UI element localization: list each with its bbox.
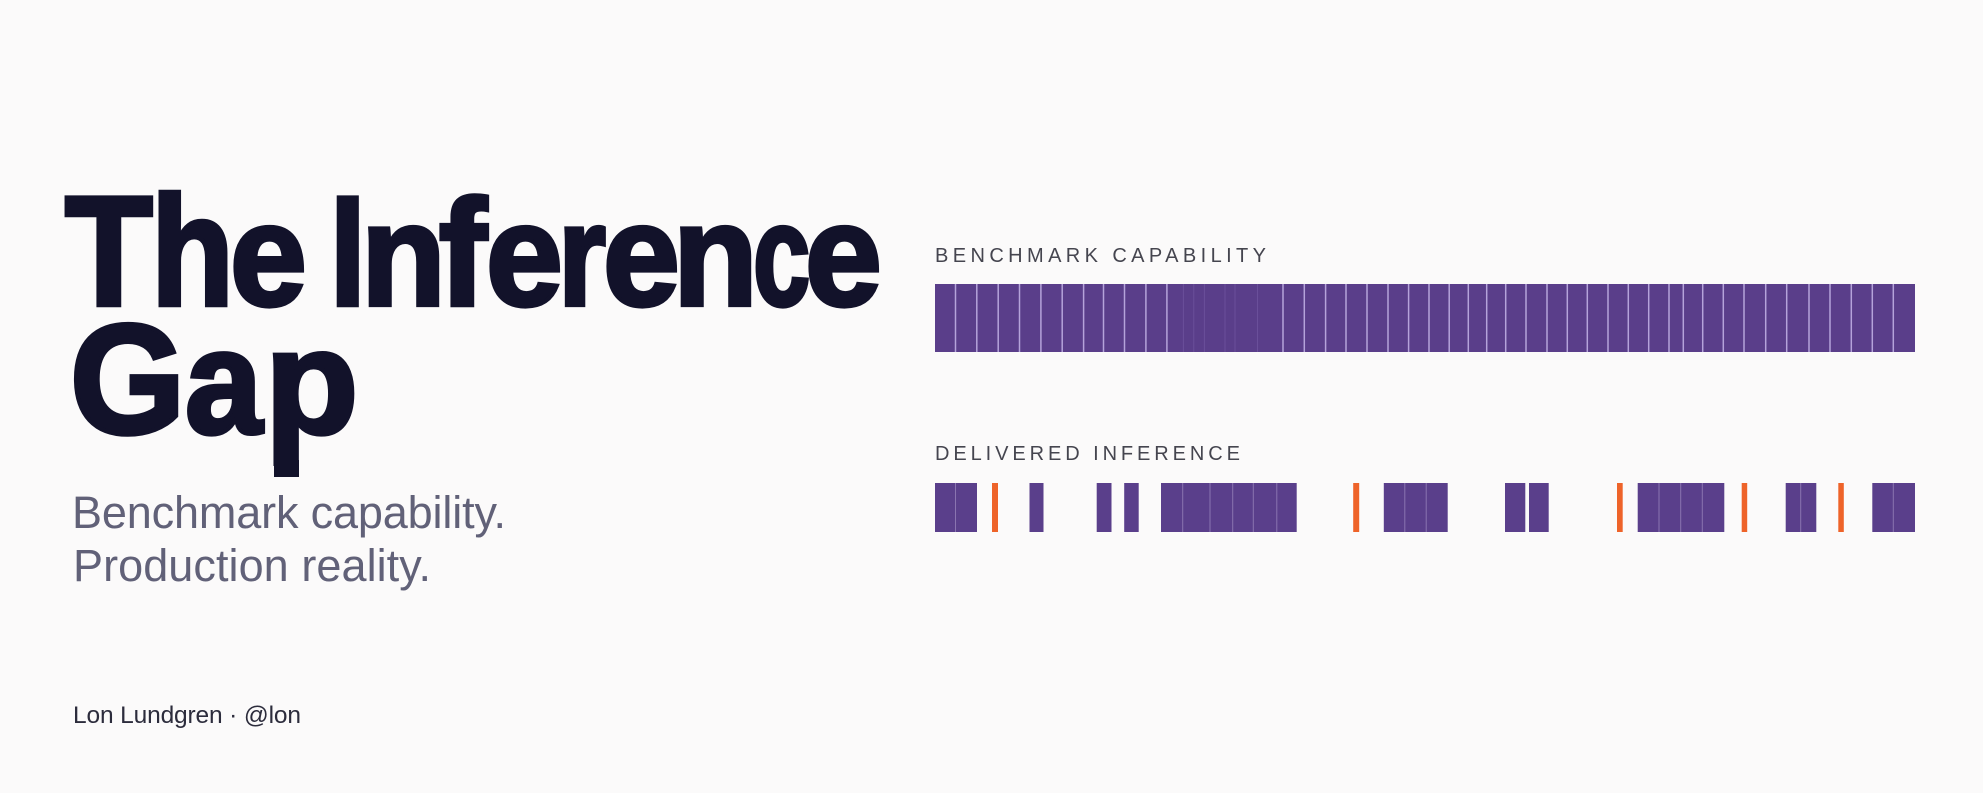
title: e [486,175,562,337]
title: a [185,300,262,465]
title: e [805,175,881,337]
title: I [330,165,365,339]
subtitle: Production reality. [73,540,431,591]
label: benchmark capability: BENCHMARK CAPABILITY [935,245,1266,267]
orange failure markers [992,483,1844,532]
title: n [360,175,445,337]
title: G [70,293,185,467]
subtitle [72,487,506,591]
author credit: Lon Lundgren · @lon [73,702,301,729]
title: p [265,300,358,465]
title: n [672,175,757,337]
title: c [753,175,810,337]
bar: benchmark capability segments [935,284,1915,352]
title [64,165,881,477]
title: f [439,169,487,338]
delivered purple blocks [935,483,1915,532]
bar: delivered inference segments with gaps [935,483,1915,532]
title: e [603,175,679,337]
subtitle: Benchmark capability. [72,487,506,538]
title: T [65,165,153,339]
title: h [151,165,234,339]
title: r [558,175,606,337]
label: delivered inference: DELIVERED INFERENCE [935,443,1240,465]
title: e [230,175,307,337]
